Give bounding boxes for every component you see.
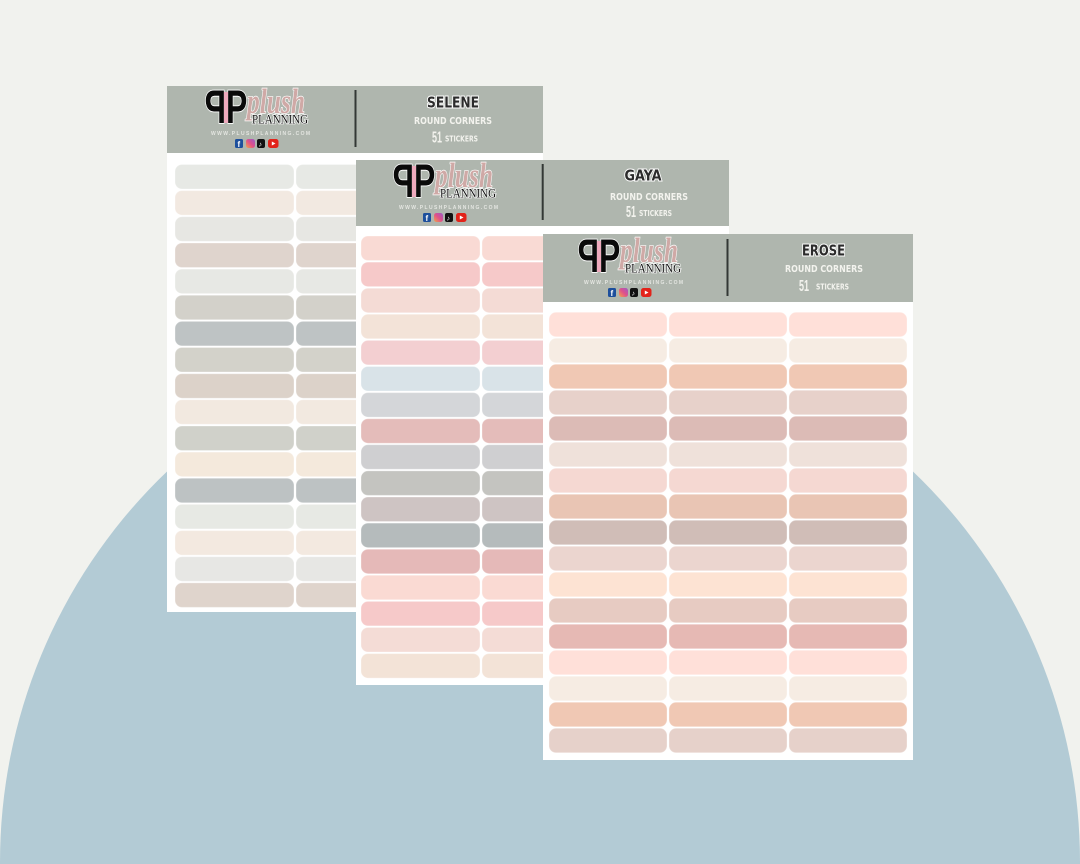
sheet: Erose (543, 230, 913, 760)
sheet: Gaya (356, 155, 729, 685)
Gaya subtitle: ROUND CORNERS (610, 192, 688, 203)
Gaya divider (542, 164, 544, 220)
Gaya brand logo: WWW.PLUSHPLANNING.COM (399, 205, 498, 211)
Erose title: EROSE (802, 242, 845, 260)
Selene header band (167, 86, 543, 153)
Selene title: SELENE (427, 94, 479, 112)
Erose brand logo: P (578, 230, 599, 283)
Selene subtitle: ROUND CORNERS (414, 116, 492, 127)
sheet: Selene (167, 81, 543, 612)
Erose sticker count (799, 278, 849, 295)
Gaya sticker grid (361, 236, 601, 678)
Selene brand logo: WWW.PLUSHPLANNING.COM (211, 131, 310, 137)
Gaya sticker count (626, 204, 672, 221)
Gaya sticker count: STICKERS (639, 209, 672, 218)
Selene brand logo: P (205, 81, 226, 134)
Selene brand logo: PLANNING (252, 112, 308, 126)
blue arch (0, 322, 1080, 864)
Selene brand logo (205, 81, 310, 149)
Selene sticker count (432, 130, 478, 146)
Selene brand logo: ♪ (258, 142, 262, 148)
Gaya header band (356, 160, 729, 226)
Selene sticker grid (175, 164, 415, 607)
Erose brand logo: PLANNING (625, 262, 681, 276)
Erose brand logo (578, 230, 683, 298)
Erose header band (543, 234, 913, 302)
Selene brand logo: plush (245, 82, 305, 121)
Gaya brand logo: plush (433, 156, 493, 195)
Selene divider (354, 90, 356, 147)
Erose sticker grid (549, 312, 907, 753)
Gaya brand logo: P (393, 155, 414, 208)
Gaya sticker count: 51 (626, 204, 636, 221)
Gaya brand logo: PLANNING (440, 186, 496, 200)
Erose brand logo: P (599, 230, 620, 283)
Selene sticker count: STICKERS (445, 134, 478, 144)
Gaya title: GAYA (624, 166, 662, 184)
Erose divider (726, 239, 728, 296)
Selene brand logo: f (238, 140, 240, 149)
Erose sticker count: STICKERS (816, 282, 849, 292)
Gaya brand logo: P (414, 155, 435, 208)
Erose subtitle: ROUND CORNERS (785, 264, 863, 275)
Gaya brand logo (393, 155, 498, 223)
Erose brand logo: WWW.PLUSHPLANNING.COM (584, 280, 683, 286)
Erose brand logo: ♪ (632, 290, 635, 298)
Erose brand logo: f (610, 289, 614, 298)
Gaya brand logo: f (426, 214, 428, 223)
Erose sticker count: 51 (799, 278, 809, 295)
Erose brand logo: plush (618, 231, 678, 270)
Gaya brand logo: ♪ (446, 216, 450, 222)
Selene brand logo: P (226, 81, 247, 134)
Selene sticker count: 51 (432, 130, 442, 146)
